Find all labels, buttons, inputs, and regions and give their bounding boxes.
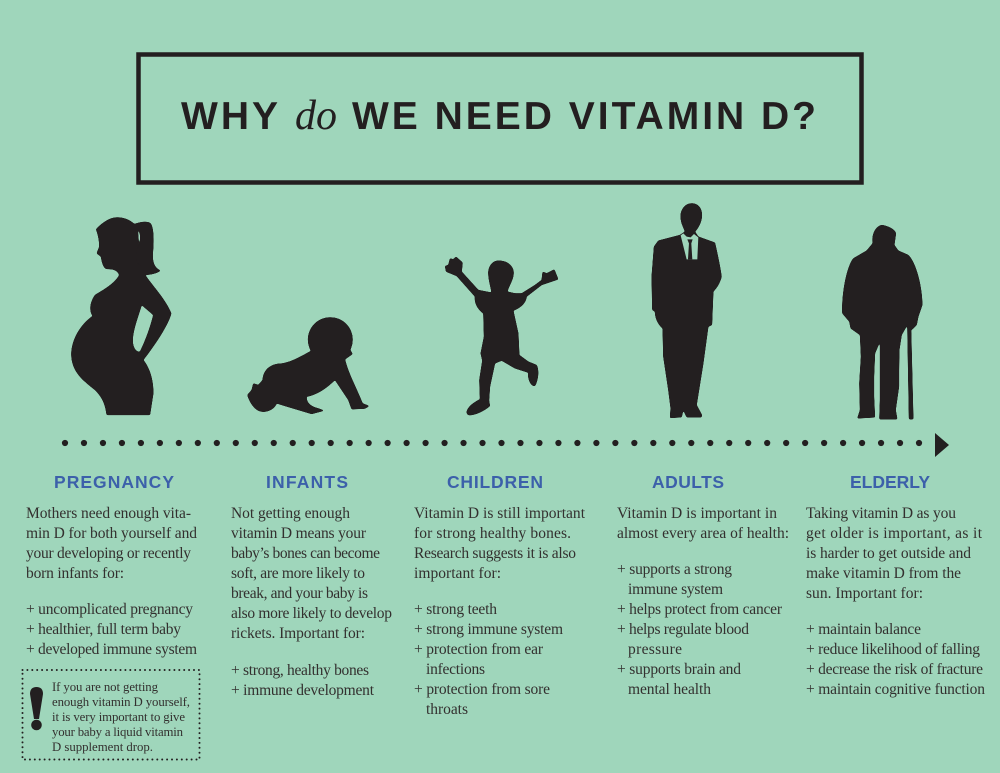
text: elderly column: is harder to get outside and <box>806 545 971 562</box>
text: elderly column: make vitamin D from the <box>806 565 961 582</box>
callout: supplement note: your baby a liquid vitamin <box>52 725 184 739</box>
icon: exclamation mark <box>30 687 43 730</box>
text: children column: + protection from sore <box>414 681 550 698</box>
text: adults column <box>617 505 789 698</box>
text: adults column: + supports a strong <box>617 561 732 578</box>
text: children column: Vitamin D is still important <box>414 505 586 522</box>
text: elderly column: sun. Important for: <box>806 585 923 602</box>
text: infants column: also more likely to develop <box>231 605 392 622</box>
text: pregnancy column: + healthier, full term baby <box>26 621 181 638</box>
text: infants column: + immune development <box>231 682 375 699</box>
text: pregnancy column <box>26 505 197 658</box>
text: infants column: soft, are more likely to <box>231 565 365 582</box>
text: children column: Research suggests it is also <box>414 545 576 562</box>
text: pregnancy column: Mothers need enough vita- <box>26 505 191 522</box>
text: infants column <box>231 505 392 699</box>
text: children column: important for: <box>414 565 501 582</box>
text: elderly column: get older is important, as it <box>806 525 983 542</box>
text: adults column: + supports brain and <box>617 661 741 678</box>
text: pregnancy column: born infants for: <box>26 565 124 582</box>
text: pregnancy column: + developed immune system <box>26 641 197 658</box>
text: adults column: immune system <box>628 581 723 598</box>
icon: crawling baby silhouette <box>247 317 369 414</box>
text: adults column: pressure <box>628 641 682 658</box>
text: adults column: + helps regulate blood <box>617 621 749 638</box>
text: adults column: + helps protect from cancer <box>617 601 783 618</box>
text: elderly column: + decrease the risk of fracture <box>806 661 983 678</box>
title text: WHY <box>181 95 278 138</box>
text: children column: + protection from ear <box>414 641 544 658</box>
heading: pregnancy: PREGNANCY <box>54 472 174 492</box>
text: elderly column <box>806 505 985 698</box>
heading: adults: ADULTS <box>652 472 724 492</box>
icon: pregnant woman silhouette <box>71 217 171 415</box>
callout: supplement note: it is very important to give <box>52 710 185 724</box>
text: elderly column: + maintain cognitive function <box>806 681 985 698</box>
text: children column: throats <box>426 701 468 718</box>
text: elderly column: + maintain balance <box>806 621 921 638</box>
callout: supplement note: D supplement drop. <box>52 740 153 754</box>
title box <box>138 54 862 182</box>
callout: supplement note: If you are not getting <box>52 680 159 694</box>
text: children column: + strong teeth <box>414 601 497 618</box>
text: pregnancy column: your developing or recently <box>26 545 191 562</box>
callout: supplement note: enough vitamin D yourself, <box>52 695 190 709</box>
text: elderly column: + reduce likelihood of falling <box>806 641 980 658</box>
text: pregnancy column: min D for both yourself and <box>26 525 197 542</box>
text: infants column: baby’s bones can become <box>231 545 380 562</box>
text: adults column: almost every area of health: <box>617 525 789 542</box>
text: infants column: rickets. Important for: <box>231 625 365 642</box>
callout: supplement note <box>22 670 200 760</box>
heading: children: CHILDREN <box>447 472 543 492</box>
text: adults column: mental health <box>628 681 711 698</box>
title text: do <box>295 93 337 139</box>
text: children column: + strong immune system <box>414 621 563 638</box>
text: children column: infections <box>426 661 485 678</box>
text: elderly column: Taking vitamin D as you <box>806 505 956 522</box>
text: infants column: vitamin D means your <box>231 525 367 542</box>
heading: infants: INFANTS <box>266 472 348 492</box>
text: infants column: break, and your baby is <box>231 585 368 602</box>
dotted timeline arrow <box>65 433 949 457</box>
icon: adult man in suit silhouette <box>652 203 722 418</box>
icon: elderly person with cane silhouette <box>842 225 922 419</box>
text: infants column: Not getting enough <box>231 505 350 522</box>
text: infants column: + strong, healthy bones <box>231 662 369 679</box>
text: pregnancy column: + uncomplicated pregnancy <box>26 601 193 618</box>
title text: WE NEED VITAMIN D? <box>352 95 816 138</box>
heading: elderly: ELDERLY <box>850 472 930 492</box>
text: children column: for strong healthy bones. <box>414 525 571 542</box>
icon: jumping child silhouette <box>445 257 558 415</box>
text: adults column: Vitamin D is important in <box>617 505 777 522</box>
text: children column <box>414 505 586 718</box>
